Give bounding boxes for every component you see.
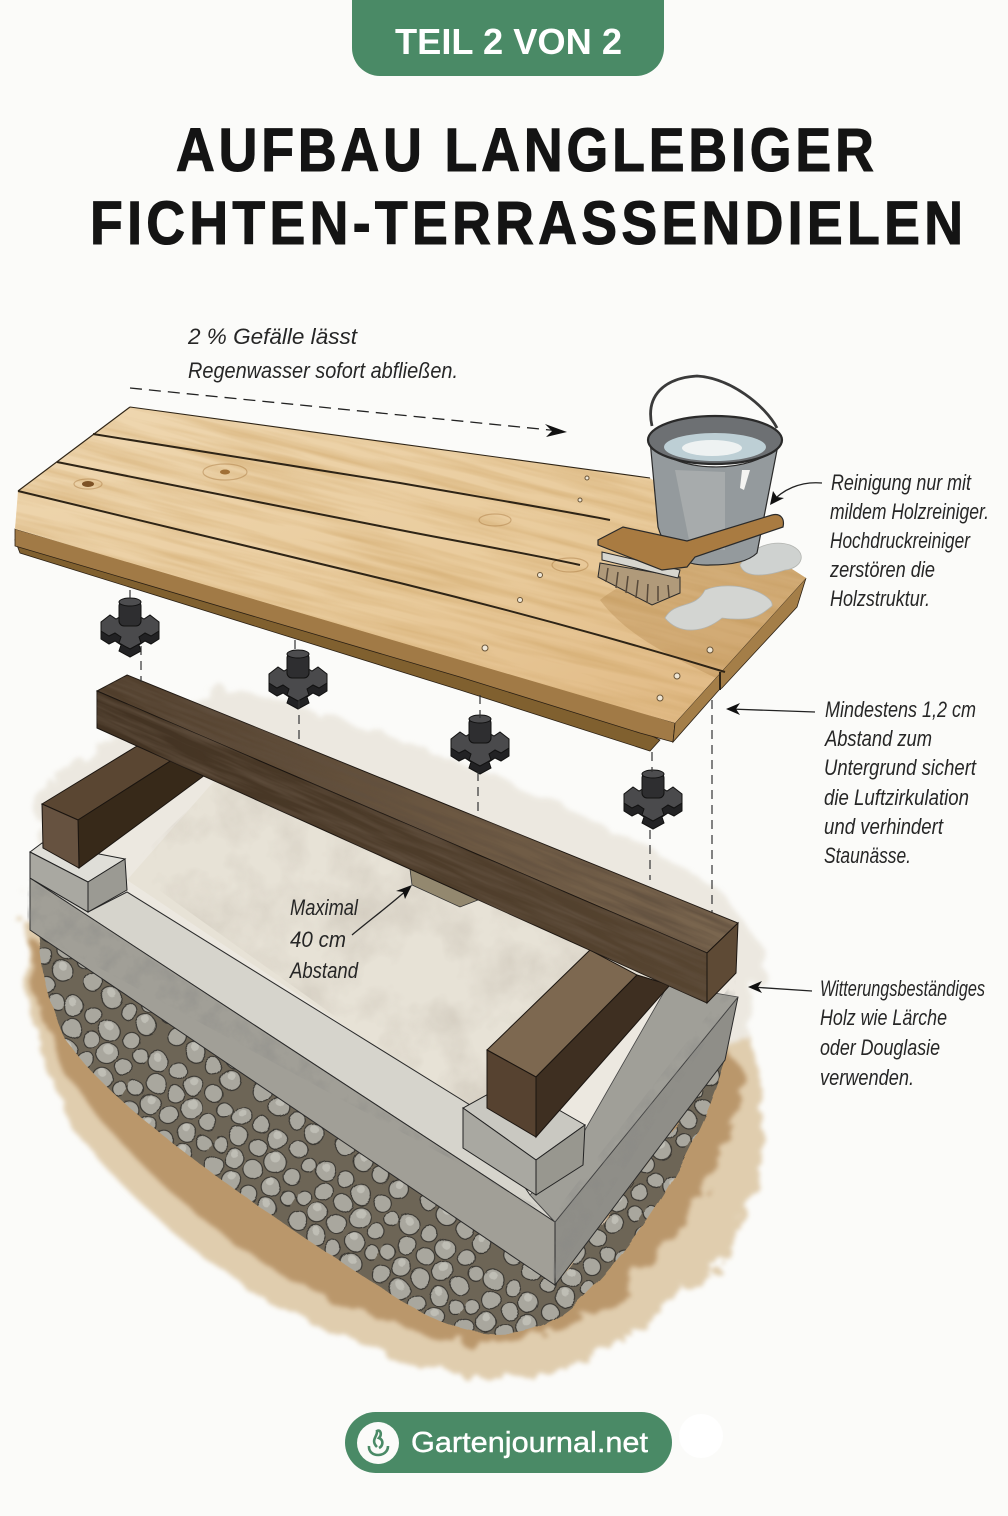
brush handle	[598, 515, 783, 570]
arrow: wood choice	[748, 981, 812, 993]
arrow: max spacing	[352, 885, 412, 935]
board seams	[18, 407, 725, 690]
deck boards	[14, 406, 806, 752]
deck board front face	[15, 529, 675, 742]
foam on deck	[665, 543, 801, 630]
scrub brush	[598, 515, 783, 605]
note: max spacing: Maximal	[290, 895, 359, 920]
gravel bed	[40, 937, 724, 1335]
brush plate	[602, 552, 680, 578]
note: cleaning	[829, 470, 989, 611]
note: wood choice: verwenden.	[820, 1065, 914, 1090]
concrete foundation slab	[20, 770, 750, 1290]
deck board right side	[673, 578, 806, 742]
screws	[482, 476, 713, 701]
left concrete block	[30, 843, 127, 912]
wet patch	[600, 558, 806, 680]
spacer pads	[101, 598, 682, 829]
note: ground clearance: die Luftzirkulation	[824, 785, 969, 810]
slab top rim	[30, 878, 555, 1222]
bristles	[598, 563, 680, 605]
ground: soil and watercolor stain	[26, 690, 765, 1378]
bucket handle	[651, 376, 777, 428]
note: max spacing: Abstand	[288, 958, 359, 983]
note: slope	[187, 324, 458, 383]
small block under joist	[410, 869, 478, 907]
logo icon	[357, 1422, 399, 1464]
badge: part 2 of 2	[352, 0, 664, 76]
note: max spacing	[288, 895, 359, 983]
slab right side	[555, 997, 738, 1285]
note: ground clearance: Staunässe.	[824, 843, 911, 868]
note: cleaning: Hochdruckreiniger	[830, 528, 971, 553]
note: wood choice	[820, 976, 985, 1090]
right support beam	[487, 950, 670, 1137]
note: ground clearance	[823, 697, 977, 868]
ghost watermark circle	[679, 1414, 723, 1458]
note: ground clearance: Abstand zum	[823, 726, 932, 751]
slab inner surface	[127, 780, 700, 1110]
note: cleaning: zerstören die	[829, 557, 935, 582]
note: ground clearance: Mindestens 1,2 cm	[825, 697, 976, 722]
main joist	[96, 674, 739, 1004]
bucket rim	[648, 416, 782, 464]
note: max spacing: 40 cm	[290, 927, 346, 952]
bucket body	[650, 440, 778, 565]
note: cleaning: Reinigung nur mit	[831, 470, 972, 495]
footer pill: Gartenjournal.net: Gartenjournal.net	[411, 1427, 648, 1459]
arrow: cleaning note to bucket	[770, 483, 822, 505]
lower deck layer	[15, 540, 660, 751]
footer pill: Gartenjournal.net	[345, 1412, 672, 1473]
note: slope: Regenwasser sofort abfließen.	[188, 358, 458, 383]
slab right top	[530, 985, 738, 1222]
badge: part 2 of 2: TEIL 2 VON 2	[395, 21, 622, 62]
note: ground clearance: und verhindert	[824, 814, 944, 839]
title: AUFBAU LANGLEBIGER	[176, 117, 874, 185]
arrow: slope direction	[130, 388, 567, 437]
slab front face	[30, 878, 555, 1285]
wood knots	[74, 464, 588, 572]
arrow: clearance	[726, 703, 815, 715]
deck top surface	[15, 407, 806, 723]
note: wood choice: Holz wie Lärche	[820, 1005, 947, 1030]
water	[664, 433, 766, 461]
right concrete block	[463, 1082, 585, 1195]
left support beam	[42, 746, 205, 868]
note: ground clearance: Untergrund sichert	[824, 755, 977, 780]
note: slope: 2 % Gefälle lässt	[187, 324, 358, 349]
bucket	[648, 376, 782, 565]
title	[90, 117, 963, 258]
dashed guide lines	[130, 590, 712, 912]
note: cleaning: Holzstruktur.	[830, 586, 930, 611]
note: wood choice: oder Douglasie	[820, 1035, 940, 1060]
title: FICHTEN-TERRASSENDIELEN	[90, 190, 963, 258]
